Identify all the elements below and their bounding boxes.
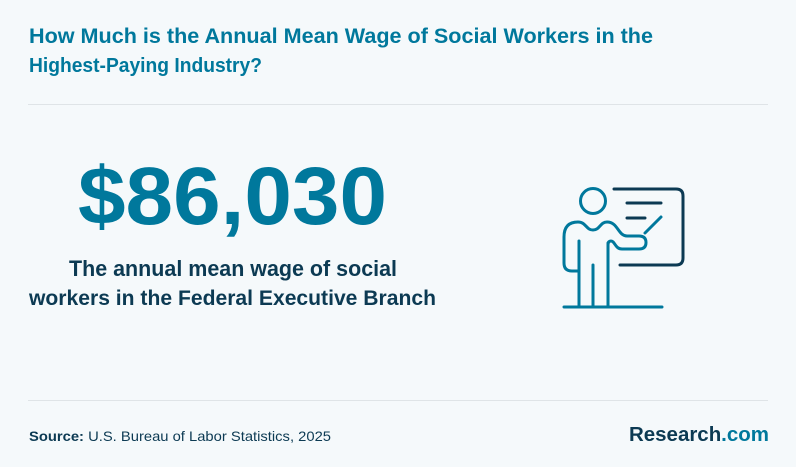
icon: presenter at board [564,188,683,307]
big number: $86,030 [78,151,387,242]
title [29,24,653,77]
description [28,256,436,310]
description: The annual mean wage of social [69,256,397,281]
title: Highest-Paying Industry? [29,55,262,77]
logo: Research.com [629,424,769,446]
description: workers in the Federal Executive Branch [28,286,436,310]
source: Source: U.S. Bureau of Labor Statistics, 2025 [29,428,331,444]
title: How Much is the Annual Mean Wage of Social Workers in the [29,24,653,48]
